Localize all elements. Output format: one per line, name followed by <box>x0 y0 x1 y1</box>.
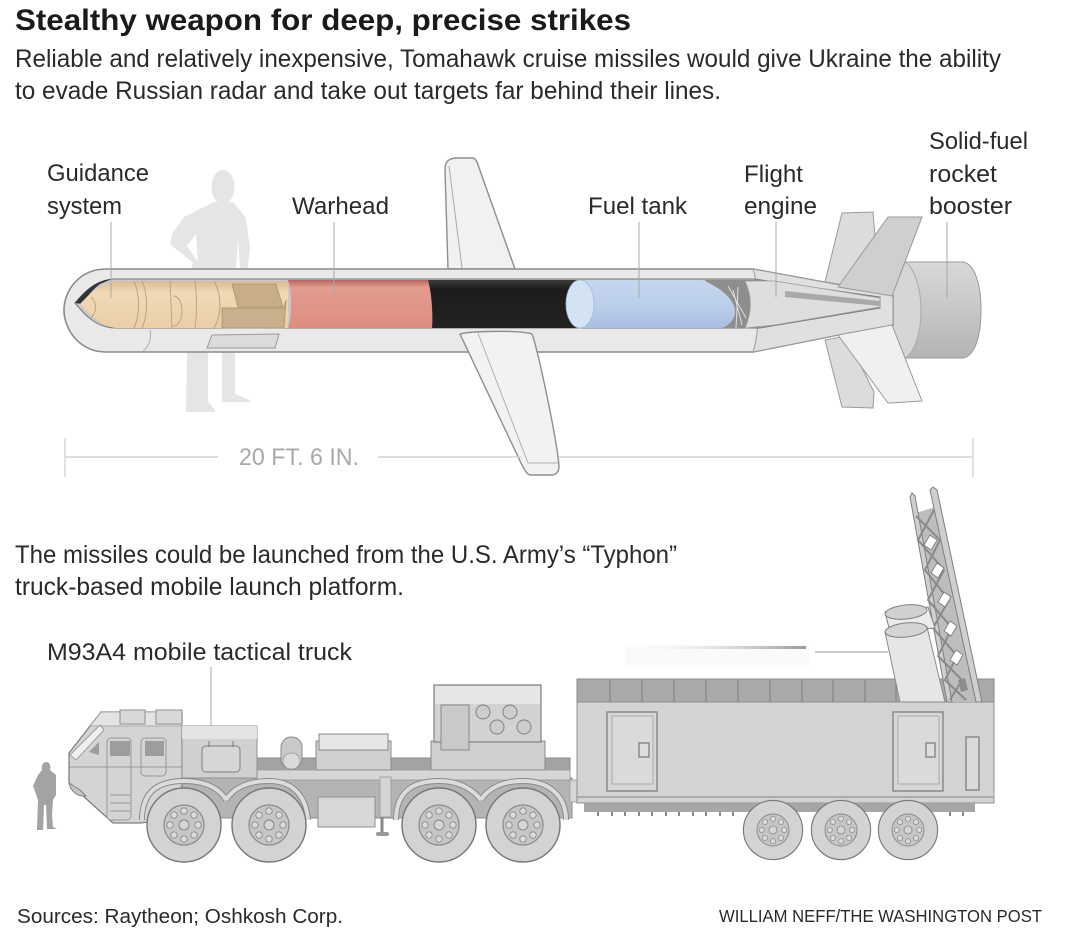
main wing top <box>445 158 515 269</box>
truck cab <box>69 710 182 823</box>
credit: WILLIAM NEFF/THE WASHINGTON POST <box>719 906 1042 926</box>
length dimension <box>65 438 973 477</box>
intro text: Reliable and relatively inexpensive, Tomahawk cruise missiles would give Ukraine the ability <box>15 45 1001 73</box>
title: Stealthy weapon for deep, precise strikes <box>15 4 631 37</box>
trailer doors <box>607 712 979 791</box>
fuel tank <box>566 280 735 328</box>
M93A4 truck <box>69 685 579 862</box>
sources: Sources: Raytheon; Oshkosh Corp. <box>17 906 343 928</box>
toolbox <box>316 734 391 770</box>
truck leader line <box>210 667 212 733</box>
missile part labels <box>47 128 1028 220</box>
truck label: M93A4 mobile tactical truck <box>47 639 353 666</box>
trailer wheels <box>743 800 938 860</box>
launcher description <box>15 541 677 601</box>
back tail fins <box>825 212 875 408</box>
main wing bottom <box>460 331 559 475</box>
trailer base rail <box>577 797 994 816</box>
launcher tower lattice <box>910 487 982 702</box>
rocket booster <box>890 262 981 358</box>
launcher description: truck-based mobile launch platform. <box>15 573 404 601</box>
trailer body <box>577 702 994 803</box>
guidance system section <box>75 279 288 328</box>
front tail fins <box>838 217 922 403</box>
engine housing <box>182 726 257 778</box>
launcher description: The missiles could be launched from the U.S. Army’s “Typhon” <box>15 541 677 569</box>
missile part labels: rocket <box>929 161 997 188</box>
wheel arches <box>142 781 566 820</box>
chassis frame <box>140 758 579 818</box>
lower panel detail <box>207 334 279 348</box>
intro text <box>15 45 1001 105</box>
missile body <box>64 269 893 352</box>
exhaust canister <box>281 737 302 769</box>
jet engine section <box>705 280 880 328</box>
black section <box>428 280 600 328</box>
trailer top band <box>577 679 994 702</box>
missile part labels: Solid-fuel <box>929 128 1028 155</box>
truck wheels <box>147 788 560 862</box>
human silhouette for scale <box>170 170 250 412</box>
missile part labels: Warhead <box>292 193 389 220</box>
callout leader lines <box>111 222 947 298</box>
launcher trailer <box>577 679 994 860</box>
missile part labels: engine <box>744 193 817 220</box>
missile part labels: Fuel tank <box>588 193 688 220</box>
interior cavity <box>75 279 880 328</box>
warhead section <box>288 280 432 328</box>
missile part labels: Flight <box>744 161 803 188</box>
missile part labels: Guidance <box>47 160 149 187</box>
missile part labels: system <box>47 193 122 220</box>
generator unit <box>431 685 545 770</box>
length dimension: 20 FT. 6 IN. <box>239 444 359 471</box>
intro text: to evade Russian radar and take out targets far behind their lines. <box>15 77 721 105</box>
missile <box>64 158 981 475</box>
missile part labels: booster <box>929 193 1012 220</box>
launch tubes <box>884 603 945 702</box>
fuel tank on truck <box>318 777 391 836</box>
small person for scale <box>33 762 57 830</box>
faded launcher callout <box>625 645 888 665</box>
